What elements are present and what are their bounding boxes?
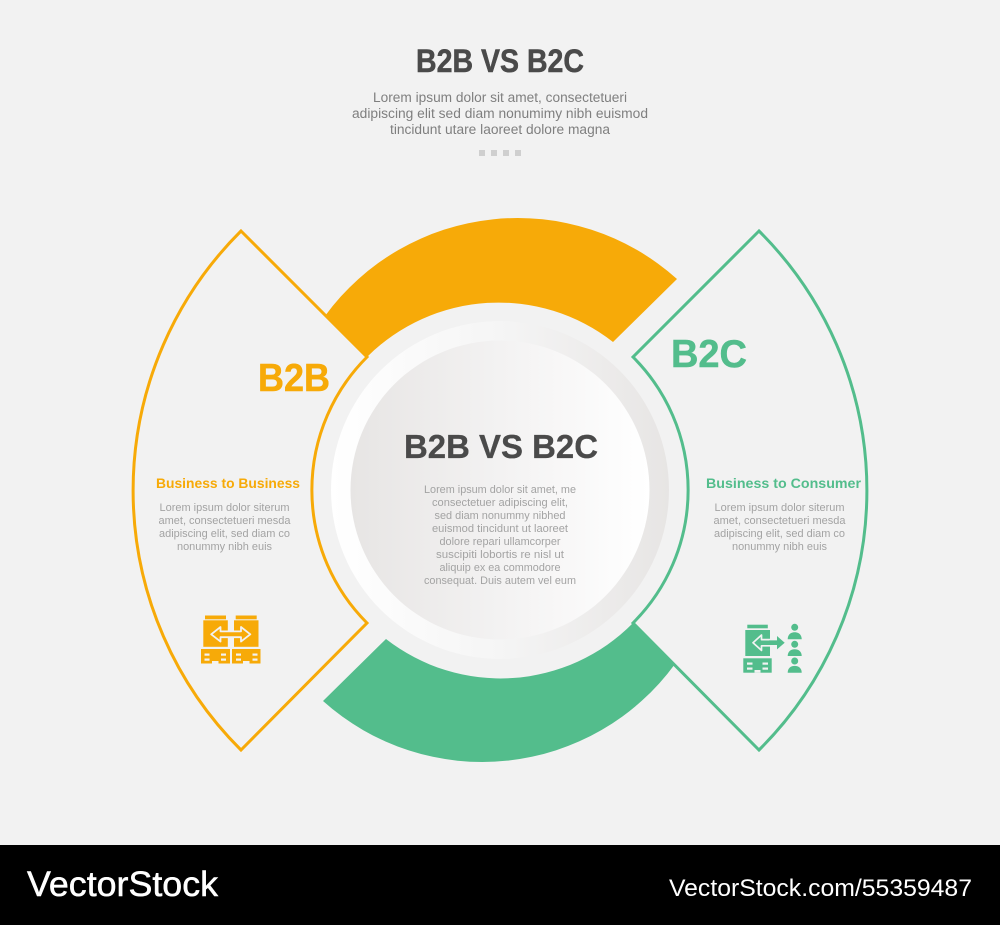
icon: pallets exchange — [201, 616, 260, 664]
B2C paragraph: Lorem ipsum dolor siterum — [714, 502, 844, 514]
center paragraph — [424, 484, 576, 587]
center paragraph: dolore repari ullamcorper — [440, 536, 561, 548]
B2B paragraph: adipiscing elit, sed diam co — [159, 528, 290, 540]
B2C paragraph: amet, consectetueri mesda — [714, 515, 846, 527]
center text block — [404, 429, 598, 587]
B2B description — [156, 476, 300, 553]
footer logo: VectorStock — [27, 865, 219, 904]
center paragraph: sed diam nonummy nibhed — [434, 510, 566, 522]
center paragraph: suscipiti lobortis re nisl ut — [436, 549, 564, 561]
B2B paragraph: nonummy nibh euis — [177, 541, 272, 553]
header — [352, 43, 648, 156]
panel: B2C outline — [633, 231, 867, 750]
B2B label: B2B — [258, 357, 330, 400]
center disc — [350, 340, 650, 640]
center paragraph: euismod tincidunt ut laoreet — [432, 523, 568, 535]
B2C subheading: Business to Consumer — [706, 476, 862, 491]
subtitle text: adipiscing elit sed diam nonumimy nibh euismod — [352, 106, 648, 121]
orange top arc segment — [325, 218, 677, 357]
B2C paragraph: nonummy nibh euis — [732, 541, 827, 553]
subtitle text — [352, 90, 648, 137]
center paragraph: Lorem ipsum dolor sit amet, me — [424, 484, 576, 496]
B2C paragraph: adipiscing elit, sed diam co — [714, 528, 845, 540]
four dots divider — [479, 150, 521, 156]
title: B2B VS B2C — [416, 43, 584, 79]
footer bar — [0, 845, 1000, 925]
B2B paragraph: Lorem ipsum dolor siterum — [160, 502, 290, 514]
icon: pallet to consumers — [743, 624, 802, 673]
subtitle text: tincidunt utare laoreet dolore magna — [390, 122, 610, 137]
B2B paragraph — [158, 502, 291, 553]
B2C description — [706, 476, 862, 553]
center paragraph: aliquip ex ea commodore — [440, 562, 560, 574]
B2B subheading: Business to Business — [156, 476, 300, 491]
panel: B2B outline — [133, 231, 367, 750]
footer url: VectorStock.com/55359487 — [669, 875, 972, 902]
center paragraph: consectetuer adipiscing elit, — [432, 497, 568, 509]
subtitle text: Lorem ipsum dolor sit amet, consectetueri — [373, 90, 627, 105]
center ring — [331, 321, 669, 659]
B2C paragraph — [714, 502, 846, 553]
center heading: B2B VS B2C — [404, 429, 598, 466]
green bottom arc segment — [323, 623, 675, 762]
B2B paragraph: amet, consectetueri mesda — [158, 515, 291, 527]
B2C label: B2C — [671, 333, 747, 376]
center paragraph: consequat. Duis autem vel eum — [424, 575, 576, 587]
